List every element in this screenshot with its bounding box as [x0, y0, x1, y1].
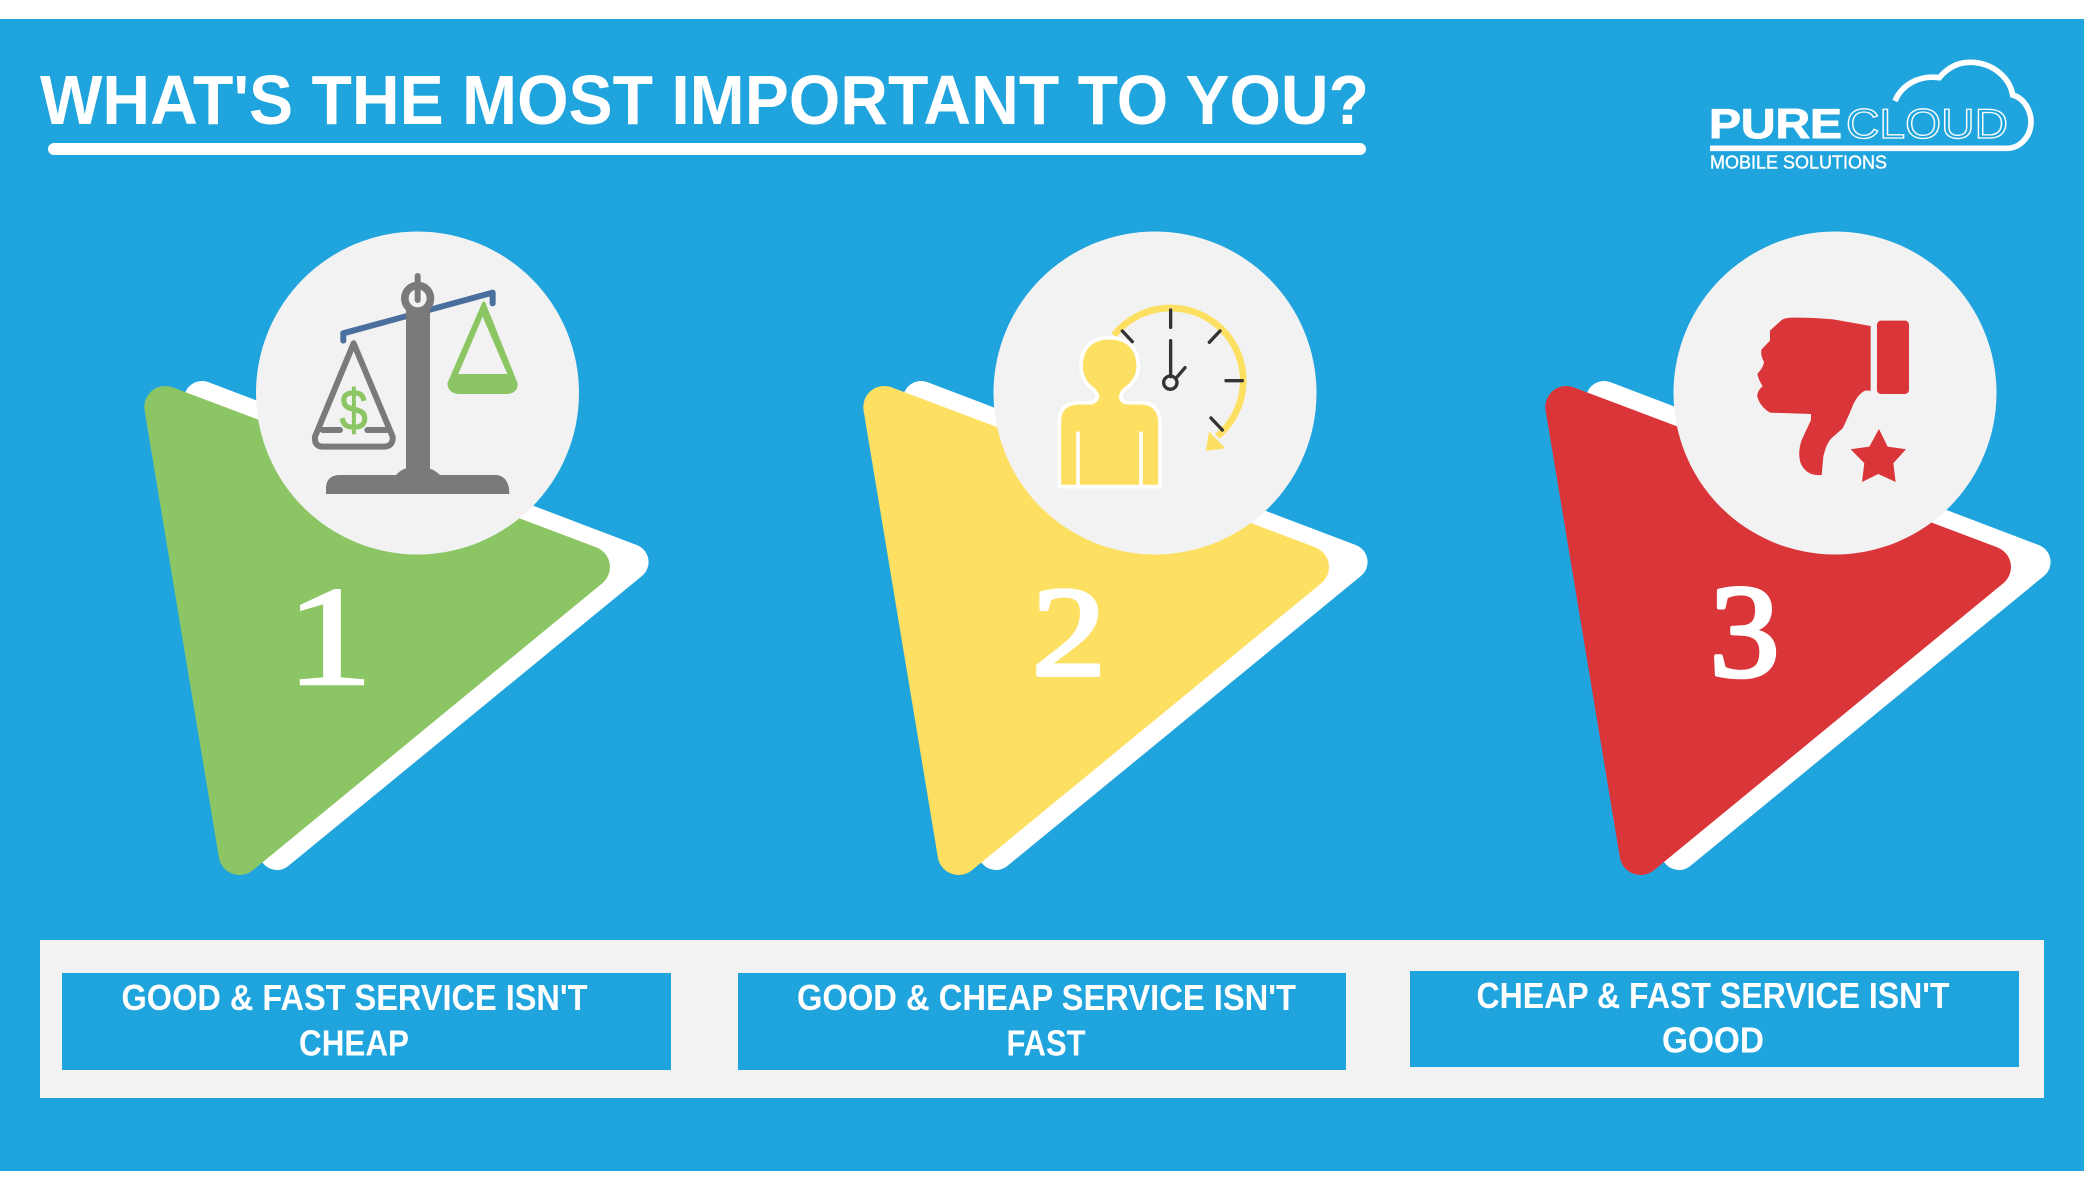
white triangle shadow 1: [202, 399, 631, 852]
icon: person and clock: [1059, 308, 1243, 487]
white triangle shadow 3: [1604, 399, 2033, 852]
icon: scales with dollar sign: $: [340, 378, 368, 442]
number 1: 1: [286, 557, 373, 715]
caption 2: [738, 973, 1346, 1070]
caption 3: [1410, 971, 2019, 1067]
icon circle 1: [256, 232, 579, 554]
number 3: 3: [1710, 557, 1780, 705]
logo: PureCloud Mobile Solutions: [1709, 62, 2031, 172]
panel: option 1 good and fast: [165, 232, 631, 854]
icon circle 2: [994, 232, 1316, 554]
caption 2: GOOD & CHEAP SERVICE ISN'T: [797, 977, 1296, 1018]
panel: caption strip: [40, 940, 2044, 1098]
green triangle: [165, 407, 589, 854]
caption 1: CHEAP: [299, 1022, 409, 1064]
yellow triangle: [884, 407, 1308, 854]
icon: thumbs down with star: [1757, 318, 1909, 482]
number 2: 2: [1032, 561, 1106, 703]
logo: PureCloud Mobile Solutions: PURE: [1709, 100, 1842, 147]
icon: scales with dollar sign: [315, 276, 518, 494]
caption 2: FAST: [1006, 1022, 1086, 1064]
caption 3: CHEAP & FAST SERVICE ISN'T: [1476, 975, 1950, 1016]
caption 3: GOOD: [1662, 1020, 1764, 1060]
logo: PureCloud Mobile Solutions: MOBILE SOLUTIONS: [1710, 152, 1887, 172]
red triangle: [1566, 407, 1990, 854]
white triangle shadow 2: [921, 399, 1350, 852]
icon circle 3: [1674, 232, 1996, 554]
caption 1: [62, 973, 671, 1070]
panel: option 3 cheap and fast: [1566, 232, 2033, 854]
caption 1: GOOD & FAST SERVICE ISN'T: [122, 977, 588, 1018]
logo: PureCloud Mobile Solutions: CLOUD: [1846, 100, 2008, 147]
panel: option 2 good and cheap: [884, 232, 1350, 854]
title: WHAT'S THE MOST IMPORTANT TO YOU?: [40, 61, 1369, 139]
